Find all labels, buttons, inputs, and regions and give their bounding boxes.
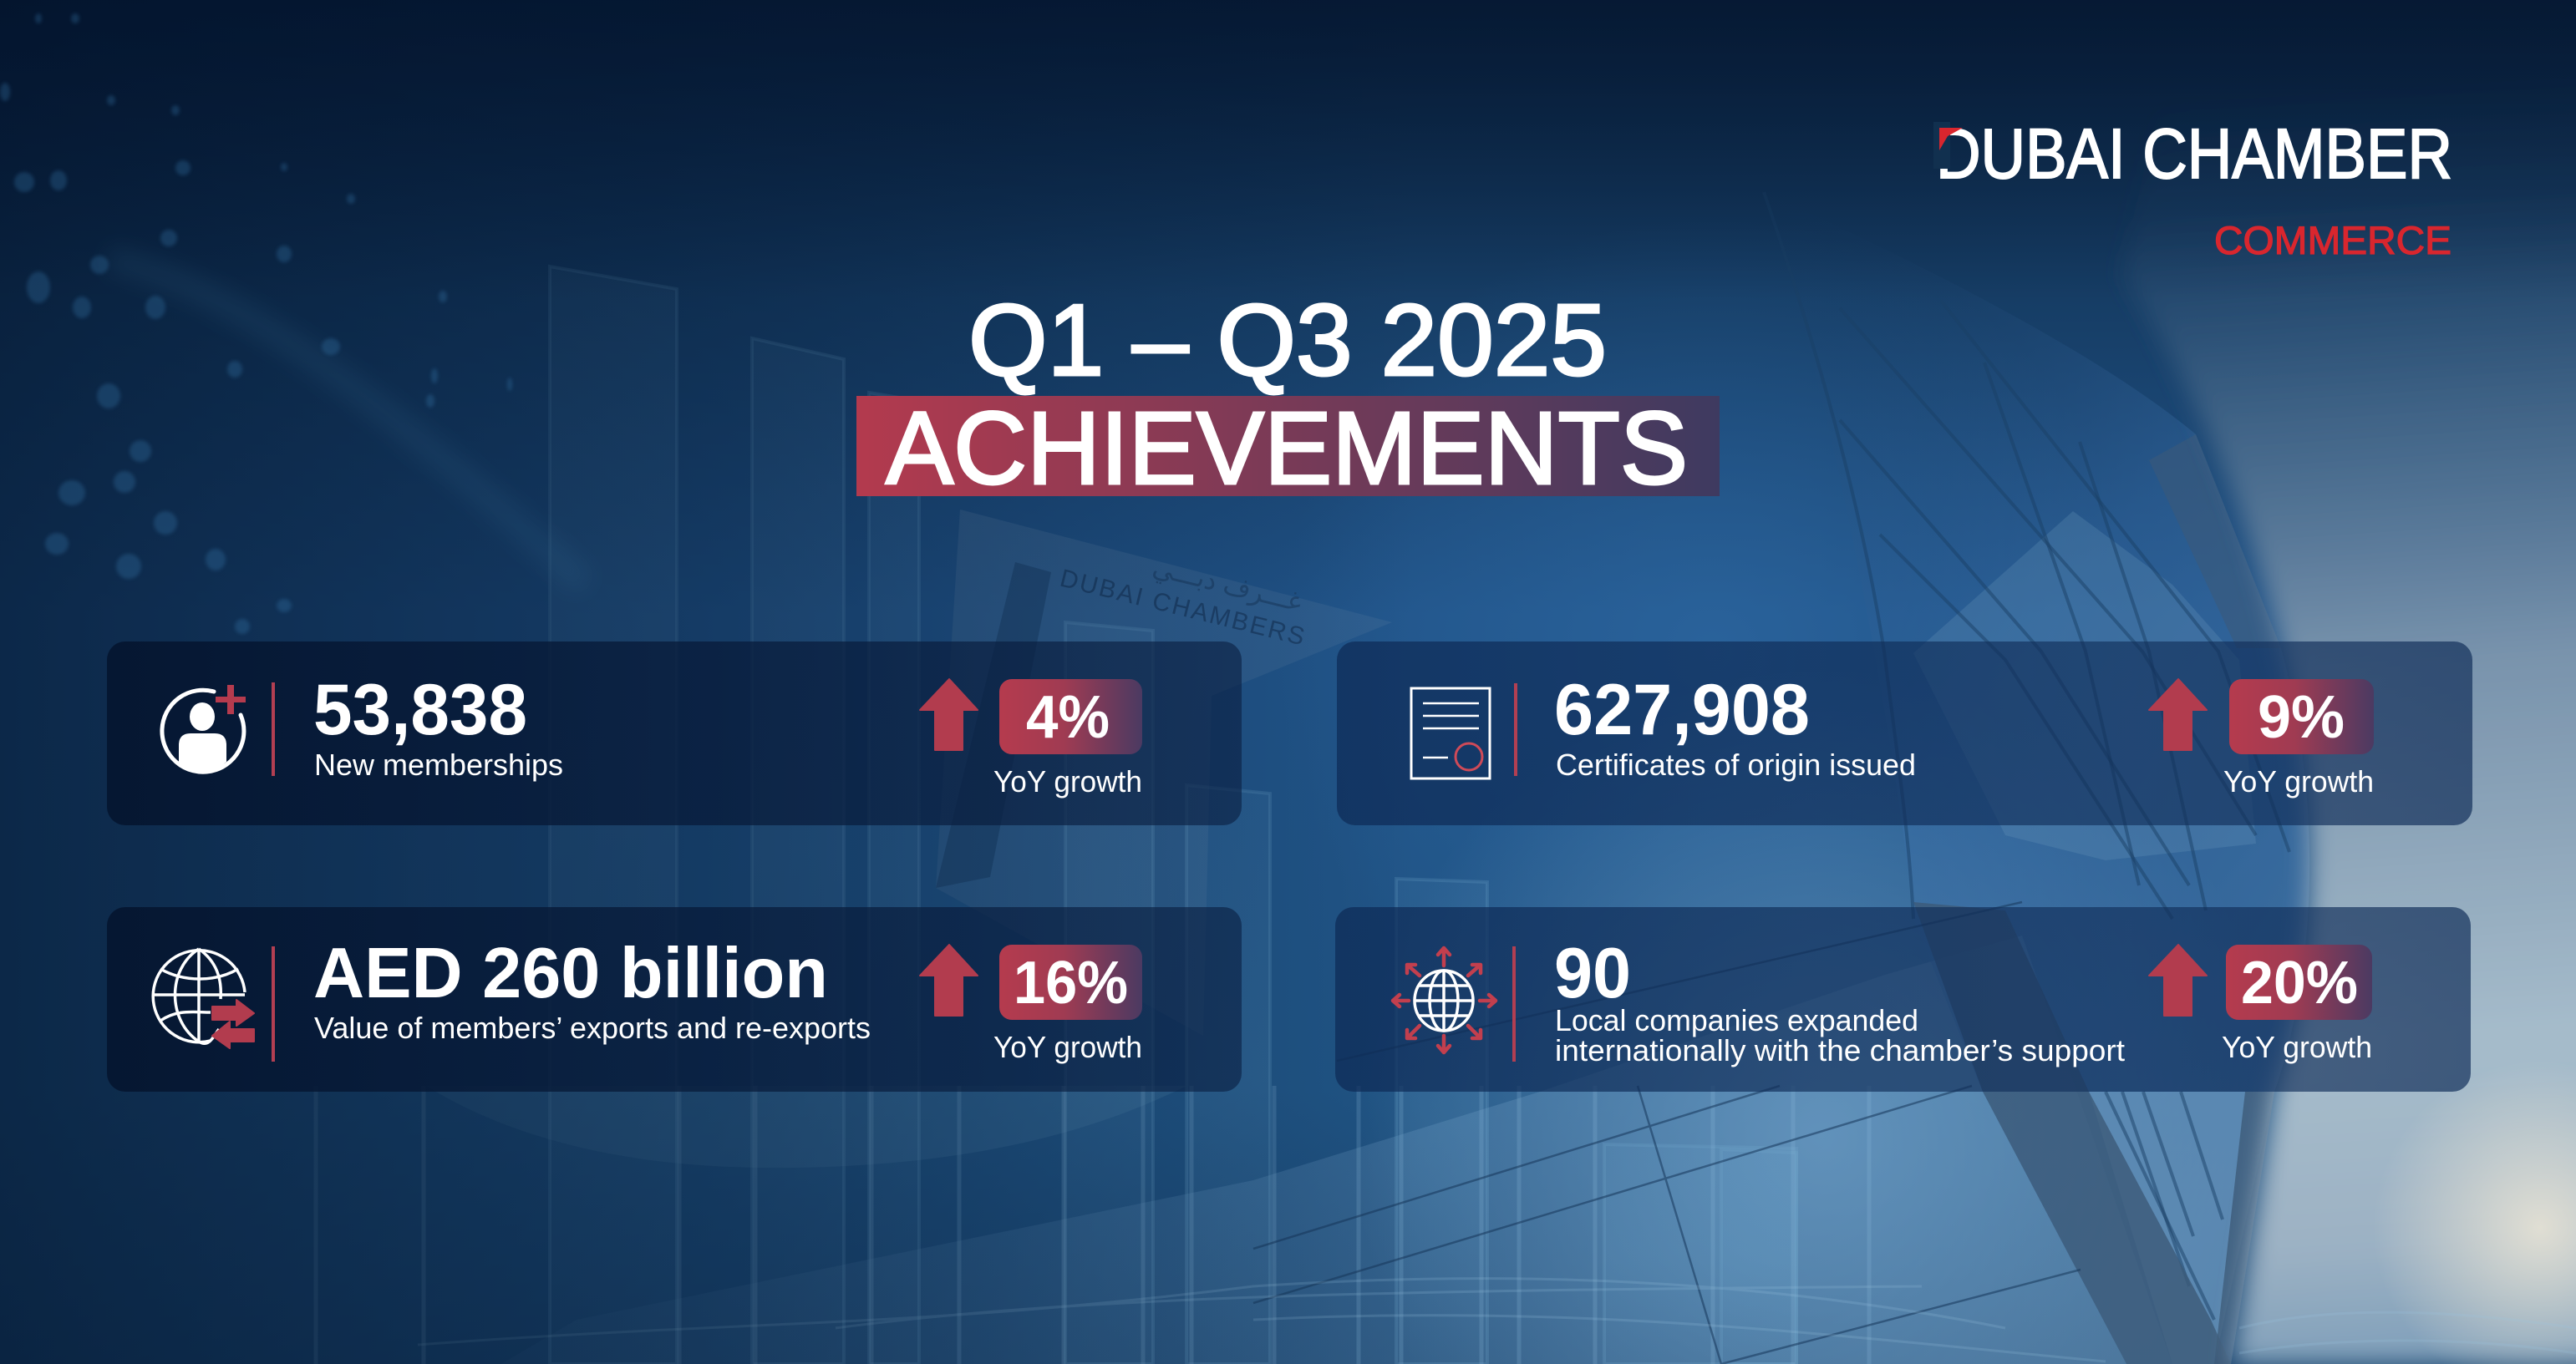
icon: up arrow xyxy=(920,679,978,750)
icon: certificate document xyxy=(1411,688,1490,778)
panel: certificates of origin xyxy=(1337,641,2472,825)
label: YoY growth: YoY growth xyxy=(2223,764,2374,799)
label: expansion description: internationally with the chamber’s support xyxy=(1555,1033,2125,1067)
badge: 20%: 20% xyxy=(2241,950,2358,1017)
panel: new memberships xyxy=(107,641,1242,825)
icon: up arrow xyxy=(2149,945,2207,1016)
title banner: achievements: ACHIEVEMENTS xyxy=(886,392,1688,506)
label: expansion description xyxy=(1555,1003,2125,1067)
divider xyxy=(272,682,275,776)
background: vertical light streaks xyxy=(316,1086,1869,1364)
background: glowing particles xyxy=(0,13,512,634)
divider xyxy=(1514,683,1517,776)
panel: international expansion xyxy=(1335,907,2471,1092)
panel: exports value xyxy=(107,907,1242,1092)
division label: Commerce: COMMERCE xyxy=(2214,218,2452,262)
label: certificates of origin issued: Certificates of origin issued xyxy=(1556,748,1916,782)
icon: up arrow xyxy=(2149,679,2207,750)
background: glass tower facade xyxy=(1764,192,2309,1364)
icon: up arrow xyxy=(920,945,978,1016)
title: period: Q1 – Q3 2025 xyxy=(968,283,1607,397)
stat: 53,838: 53,838 xyxy=(313,670,527,750)
label: exports and re-exports: Value of members’ exports and re-exports xyxy=(314,1011,871,1045)
divider xyxy=(272,946,275,1062)
background: foggy right side xyxy=(2122,33,2576,1364)
icon: person with plus xyxy=(162,685,246,772)
logo: D stem cut-out xyxy=(1933,122,1950,169)
badge: 9% xyxy=(2229,679,2374,754)
icon: globe with radiating arrows xyxy=(1393,948,1496,1052)
background: water ripples xyxy=(418,1279,2576,1361)
label: expansion description: Local companies expanded xyxy=(1555,1003,1918,1037)
divider xyxy=(1512,946,1516,1062)
background: plaque and wedge xyxy=(936,510,1392,1036)
background: translucent glass columns xyxy=(550,266,1796,1364)
stat: 627,908: 627,908 xyxy=(1554,670,1810,750)
icon: globe with exchange arrows xyxy=(153,949,254,1048)
label: YoY growth: YoY growth xyxy=(993,1030,1142,1064)
badge: 4% xyxy=(999,679,1142,754)
logo: red corner mark xyxy=(1939,128,1963,150)
background: lower diagonal plane xyxy=(501,936,2172,1364)
background: plaque and wedge: DUBAI CHAMBERS xyxy=(1057,565,1308,651)
stat: 90: 90 xyxy=(1554,934,1631,1013)
logo: Dubai Chamber: DUBAI CHAMBER xyxy=(1936,114,2452,193)
badge: 16%: 16% xyxy=(1014,950,1128,1017)
background: plaque and wedge: غـــرف دبـــي xyxy=(1150,551,1305,618)
background: dark structural piers xyxy=(1913,434,2281,1364)
label: YoY growth: YoY growth xyxy=(993,764,1142,799)
label: new memberships: New memberships xyxy=(314,748,563,782)
background: big curved glow xyxy=(426,1086,1186,1168)
badge: 4%: 4% xyxy=(1026,684,1110,751)
label: YoY growth: YoY growth xyxy=(2222,1030,2372,1064)
background: swoosh arc xyxy=(109,259,585,585)
badge: 9%: 9% xyxy=(2258,684,2345,751)
stat: AED 260 billion: AED 260 billion xyxy=(313,934,828,1013)
background: diagonal cables xyxy=(1253,902,2081,1364)
